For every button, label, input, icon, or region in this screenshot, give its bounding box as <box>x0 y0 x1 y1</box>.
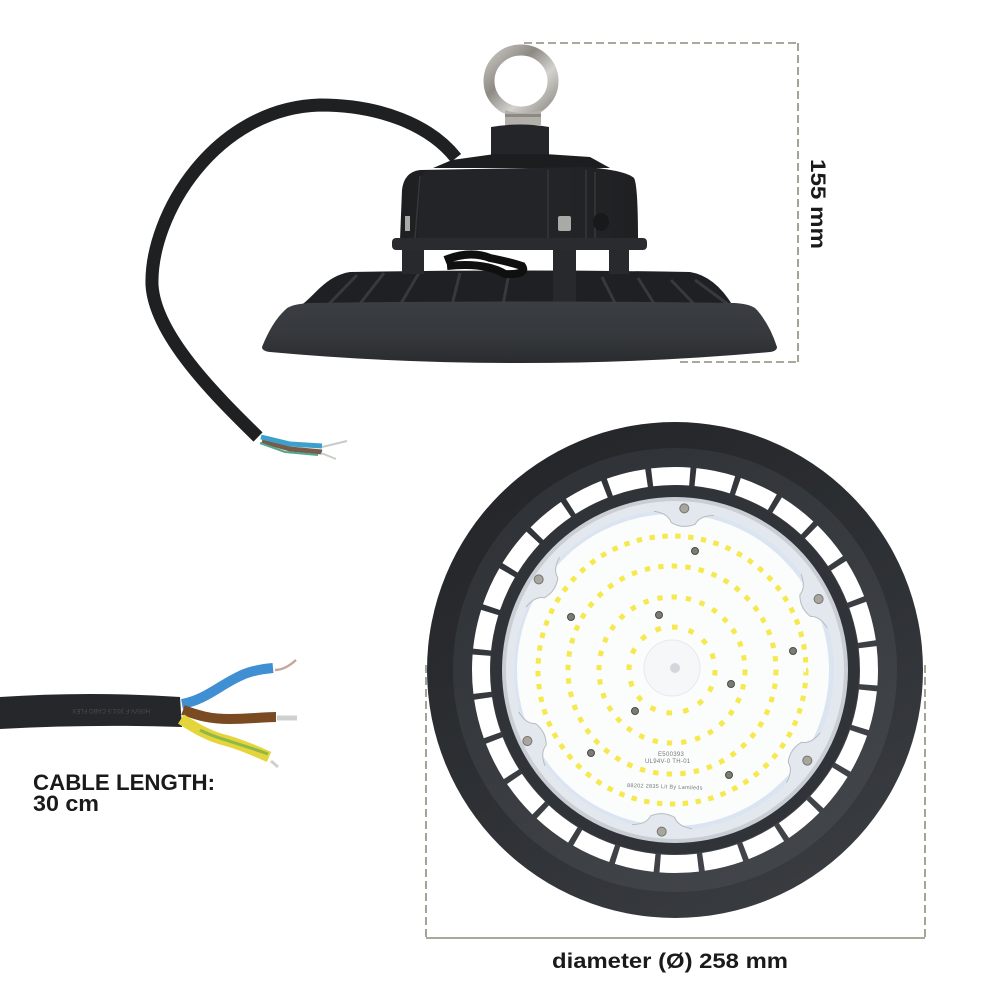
board printing: UL94V-0 TH-01 <box>645 759 691 765</box>
brown wire <box>183 710 276 719</box>
label: cable length: CABLE LENGTH: <box>33 770 215 795</box>
board screws <box>568 548 796 778</box>
sheath <box>0 694 182 729</box>
board printing: 88202 2835 Lit By Lamileds <box>627 783 703 792</box>
dimension lines: diameter <box>426 665 925 938</box>
blue wire <box>182 668 273 704</box>
lamp disk <box>262 302 777 363</box>
yellow-green wire <box>181 719 269 757</box>
side view cable <box>152 105 456 459</box>
internal cable loop <box>445 254 523 274</box>
board printing: E500393 <box>658 752 684 758</box>
cable close-up: H05VV-F 3G1.5 CABO FLEX <box>72 707 150 713</box>
bottom view of lamp <box>427 422 923 918</box>
label: diameter: diameter (Ø) 258 mm <box>552 949 788 973</box>
label: cable length: 30 cm <box>33 791 99 816</box>
LED board <box>517 514 829 826</box>
heat sink fins <box>300 270 733 306</box>
sensor hub <box>644 640 700 696</box>
support posts <box>402 250 629 305</box>
lens ring <box>502 497 848 843</box>
label: cable length <box>33 770 215 816</box>
lens clips <box>653 502 715 528</box>
outer ring <box>427 422 923 918</box>
inner ring <box>491 486 859 854</box>
cable close-up <box>0 660 297 767</box>
side view of lamp <box>262 50 777 363</box>
stem <box>491 124 549 165</box>
LED rings <box>538 536 806 804</box>
eye bolt <box>489 50 553 125</box>
housing <box>392 154 647 250</box>
board printing <box>627 752 703 792</box>
ventilation slots <box>481 476 869 864</box>
label: height: 155 mm <box>806 159 829 249</box>
dimension lines: height <box>524 43 798 362</box>
